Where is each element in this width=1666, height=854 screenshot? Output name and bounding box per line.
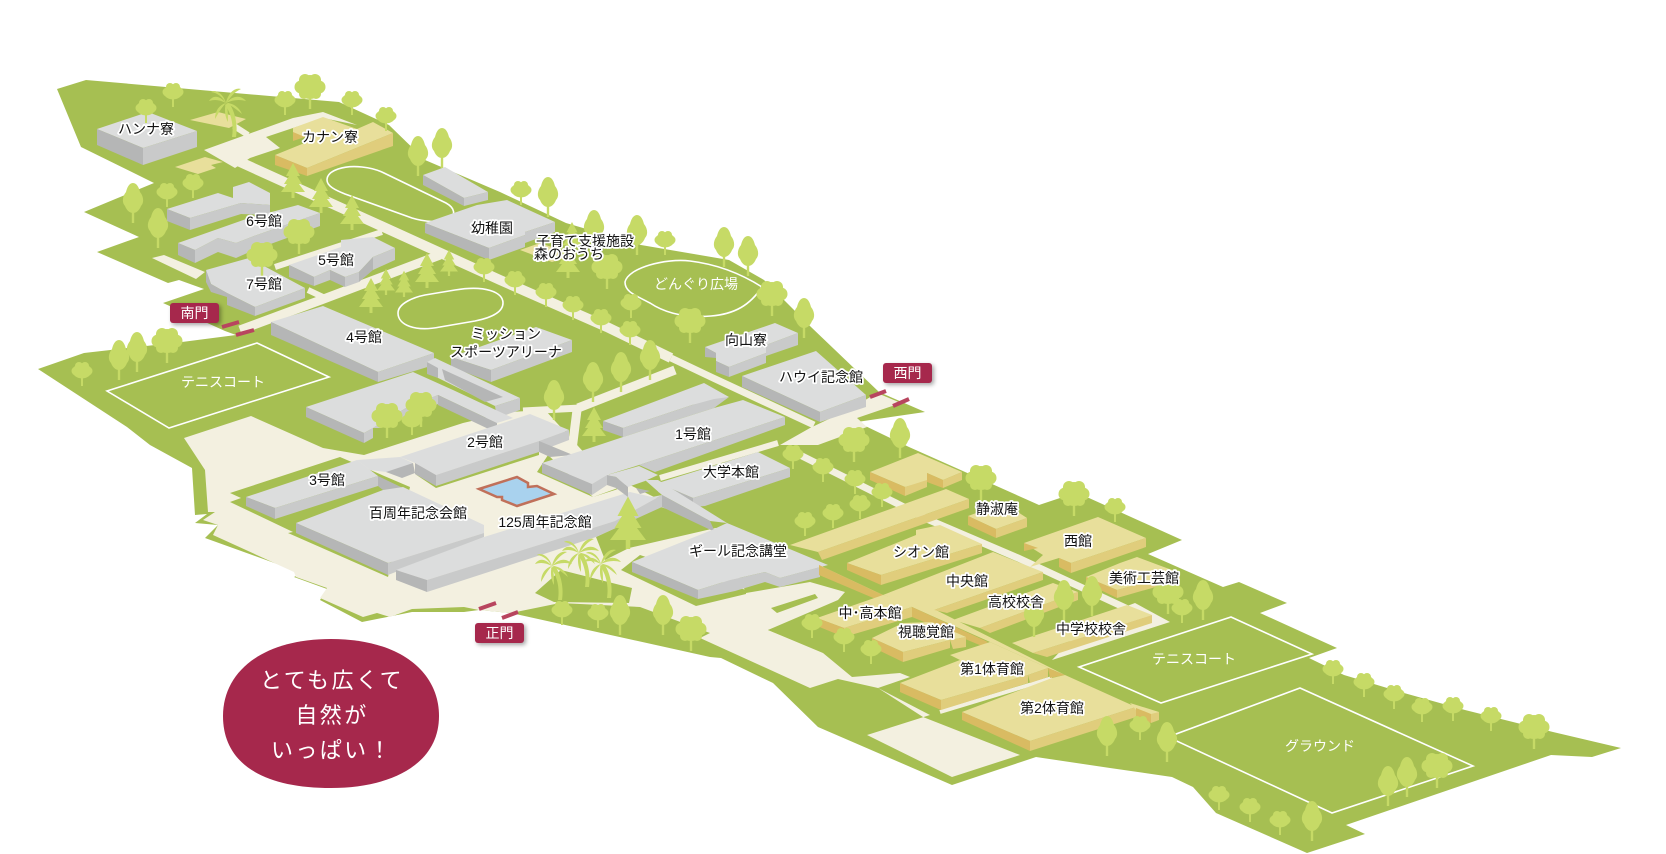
building labels: 幼稚園 [471, 220, 513, 236]
building labels: ギール記念講堂 [689, 543, 787, 559]
building: Gymnasium 2 [962, 668, 1159, 751]
trees: pines around track [281, 163, 646, 549]
roads: paths across the campus [152, 112, 1170, 712]
building labels: 2号館 [467, 434, 503, 450]
corridor: from No.4 side to No.2 [427, 358, 520, 418]
area labels: どんぐり広場 [654, 276, 738, 292]
area labels: テニスコート [181, 374, 265, 390]
building: Audiovisual Hall [872, 622, 966, 662]
trees: palms near main gate [535, 539, 621, 600]
building labels [118, 121, 1179, 716]
donguri plaza outline [625, 260, 762, 316]
building labels: 向山寮 [725, 332, 767, 348]
building: Hannah dormitory [97, 112, 197, 165]
yellow pads [175, 112, 575, 262]
gate label: south gate [170, 303, 219, 323]
building labels: 高校校舎 [988, 594, 1044, 610]
building: Middle and High School Main Hall [817, 595, 912, 637]
building labels: 森のおうち [534, 246, 604, 262]
building: corridor yellow spine [819, 565, 1065, 675]
building labels: 静淑庵 [976, 501, 1018, 517]
tennis court west outline [107, 343, 329, 428]
building: Junior High School [1012, 605, 1152, 657]
callout: balloon: とても広くて [260, 668, 404, 693]
gate label: main gate: 正門 [486, 625, 514, 641]
building: West Hall [1024, 517, 1146, 573]
building labels: カナン寮 [302, 129, 358, 145]
tennis court east outline [1079, 617, 1312, 703]
trees: north central [474, 177, 814, 420]
road: main campus plaza and southern lot [184, 410, 1020, 777]
building: Gale Memorial Hall [632, 523, 828, 599]
building: north yellow block [870, 453, 962, 496]
gate marks [222, 322, 909, 618]
building: No.5 [289, 237, 395, 287]
building labels: ハウイ記念館 [779, 369, 863, 385]
trees: north-west [123, 74, 452, 277]
trees: east campus [782, 418, 1213, 762]
callout: balloon: いっぱい！ [271, 738, 393, 763]
building: Mission Sports Arena [451, 327, 572, 382]
building labels: 子育て支援施設 [536, 233, 634, 249]
sports ground outline [1168, 688, 1473, 813]
gate label: west gate [883, 363, 932, 383]
gate label: main gate [475, 623, 524, 643]
building: south wing behind No.2 [306, 372, 513, 443]
building: long yellow wing [790, 489, 969, 560]
building: 125th Anniversary Hall [396, 492, 662, 592]
building: University Main Hall [658, 452, 790, 507]
building labels: 中･高本館 [838, 605, 902, 621]
track oval centre [398, 288, 503, 329]
area labels: テニスコート [1152, 651, 1236, 667]
building: unnamed north block [423, 167, 488, 206]
building: kindergarten [425, 200, 555, 260]
pool [479, 477, 554, 506]
building labels: 3号館 [309, 472, 345, 488]
building labels: 第1体育館 [960, 661, 1024, 677]
building labels: 1号館 [675, 426, 711, 442]
corridor: to Gale Memorial Hall [645, 480, 727, 532]
callout: balloon [223, 639, 439, 788]
building labels: 125周年記念館 [498, 514, 592, 530]
gate label: south gate: 南門 [180, 305, 208, 321]
corridor: No.2 to No.1 [539, 441, 573, 457]
building: Gymnasium 1 [900, 642, 1048, 710]
track oval north [327, 167, 454, 222]
gate label: west gate: 西門 [894, 365, 922, 381]
building: Sion Hall [847, 525, 982, 585]
building: Howie Memorial Hall [742, 351, 866, 422]
building labels: 百周年記念会館 [369, 505, 467, 521]
building: No.2 [400, 414, 569, 486]
building labels: ハンナ寮 [118, 121, 174, 137]
building: No.3 with corridor [246, 457, 415, 519]
building: No.6 [167, 182, 320, 263]
area labels [181, 276, 1355, 754]
building: Central Hall [883, 552, 1043, 613]
building labels: 第2体育館 [1020, 700, 1084, 716]
building labels: 中央館 [946, 573, 988, 589]
building: Mukaiyama dormitory [705, 323, 798, 377]
building labels: 大学本館 [703, 464, 759, 480]
building: Centennial Memorial Hall [296, 487, 484, 575]
building: Canaan dormitory [275, 117, 393, 176]
building labels: 6号館 [246, 213, 282, 229]
building labels: 中学校校舎 [1056, 621, 1126, 637]
building: Arts and Crafts Hall [1086, 557, 1180, 598]
building labels: 4号館 [346, 329, 382, 345]
area labels: グラウンド [1285, 738, 1355, 754]
building labels: 5号館 [318, 252, 354, 268]
building labels: シオン館 [893, 544, 949, 560]
building: No.4 [271, 306, 434, 382]
building: High School [953, 583, 1078, 633]
trees: around sports ground [1208, 660, 1550, 841]
trees: west lawn [72, 328, 436, 438]
trees: south row by main gate [552, 595, 706, 651]
callout: balloon: 自然が [295, 703, 369, 728]
building labels: 美術工芸館 [1109, 570, 1179, 586]
building labels: 7号館 [246, 276, 282, 292]
building: No.7 [206, 258, 305, 316]
building labels: スポーツアリーナ [450, 344, 562, 360]
building labels: 西館 [1064, 533, 1092, 549]
building: Seishuku-an [968, 503, 1027, 538]
connector block beside No.1 [592, 466, 658, 497]
green patches inside the plaza [230, 451, 905, 676]
building labels: ミッション [471, 326, 541, 342]
building labels: 視聴覚館 [898, 624, 954, 640]
building: No.1 [542, 383, 785, 495]
